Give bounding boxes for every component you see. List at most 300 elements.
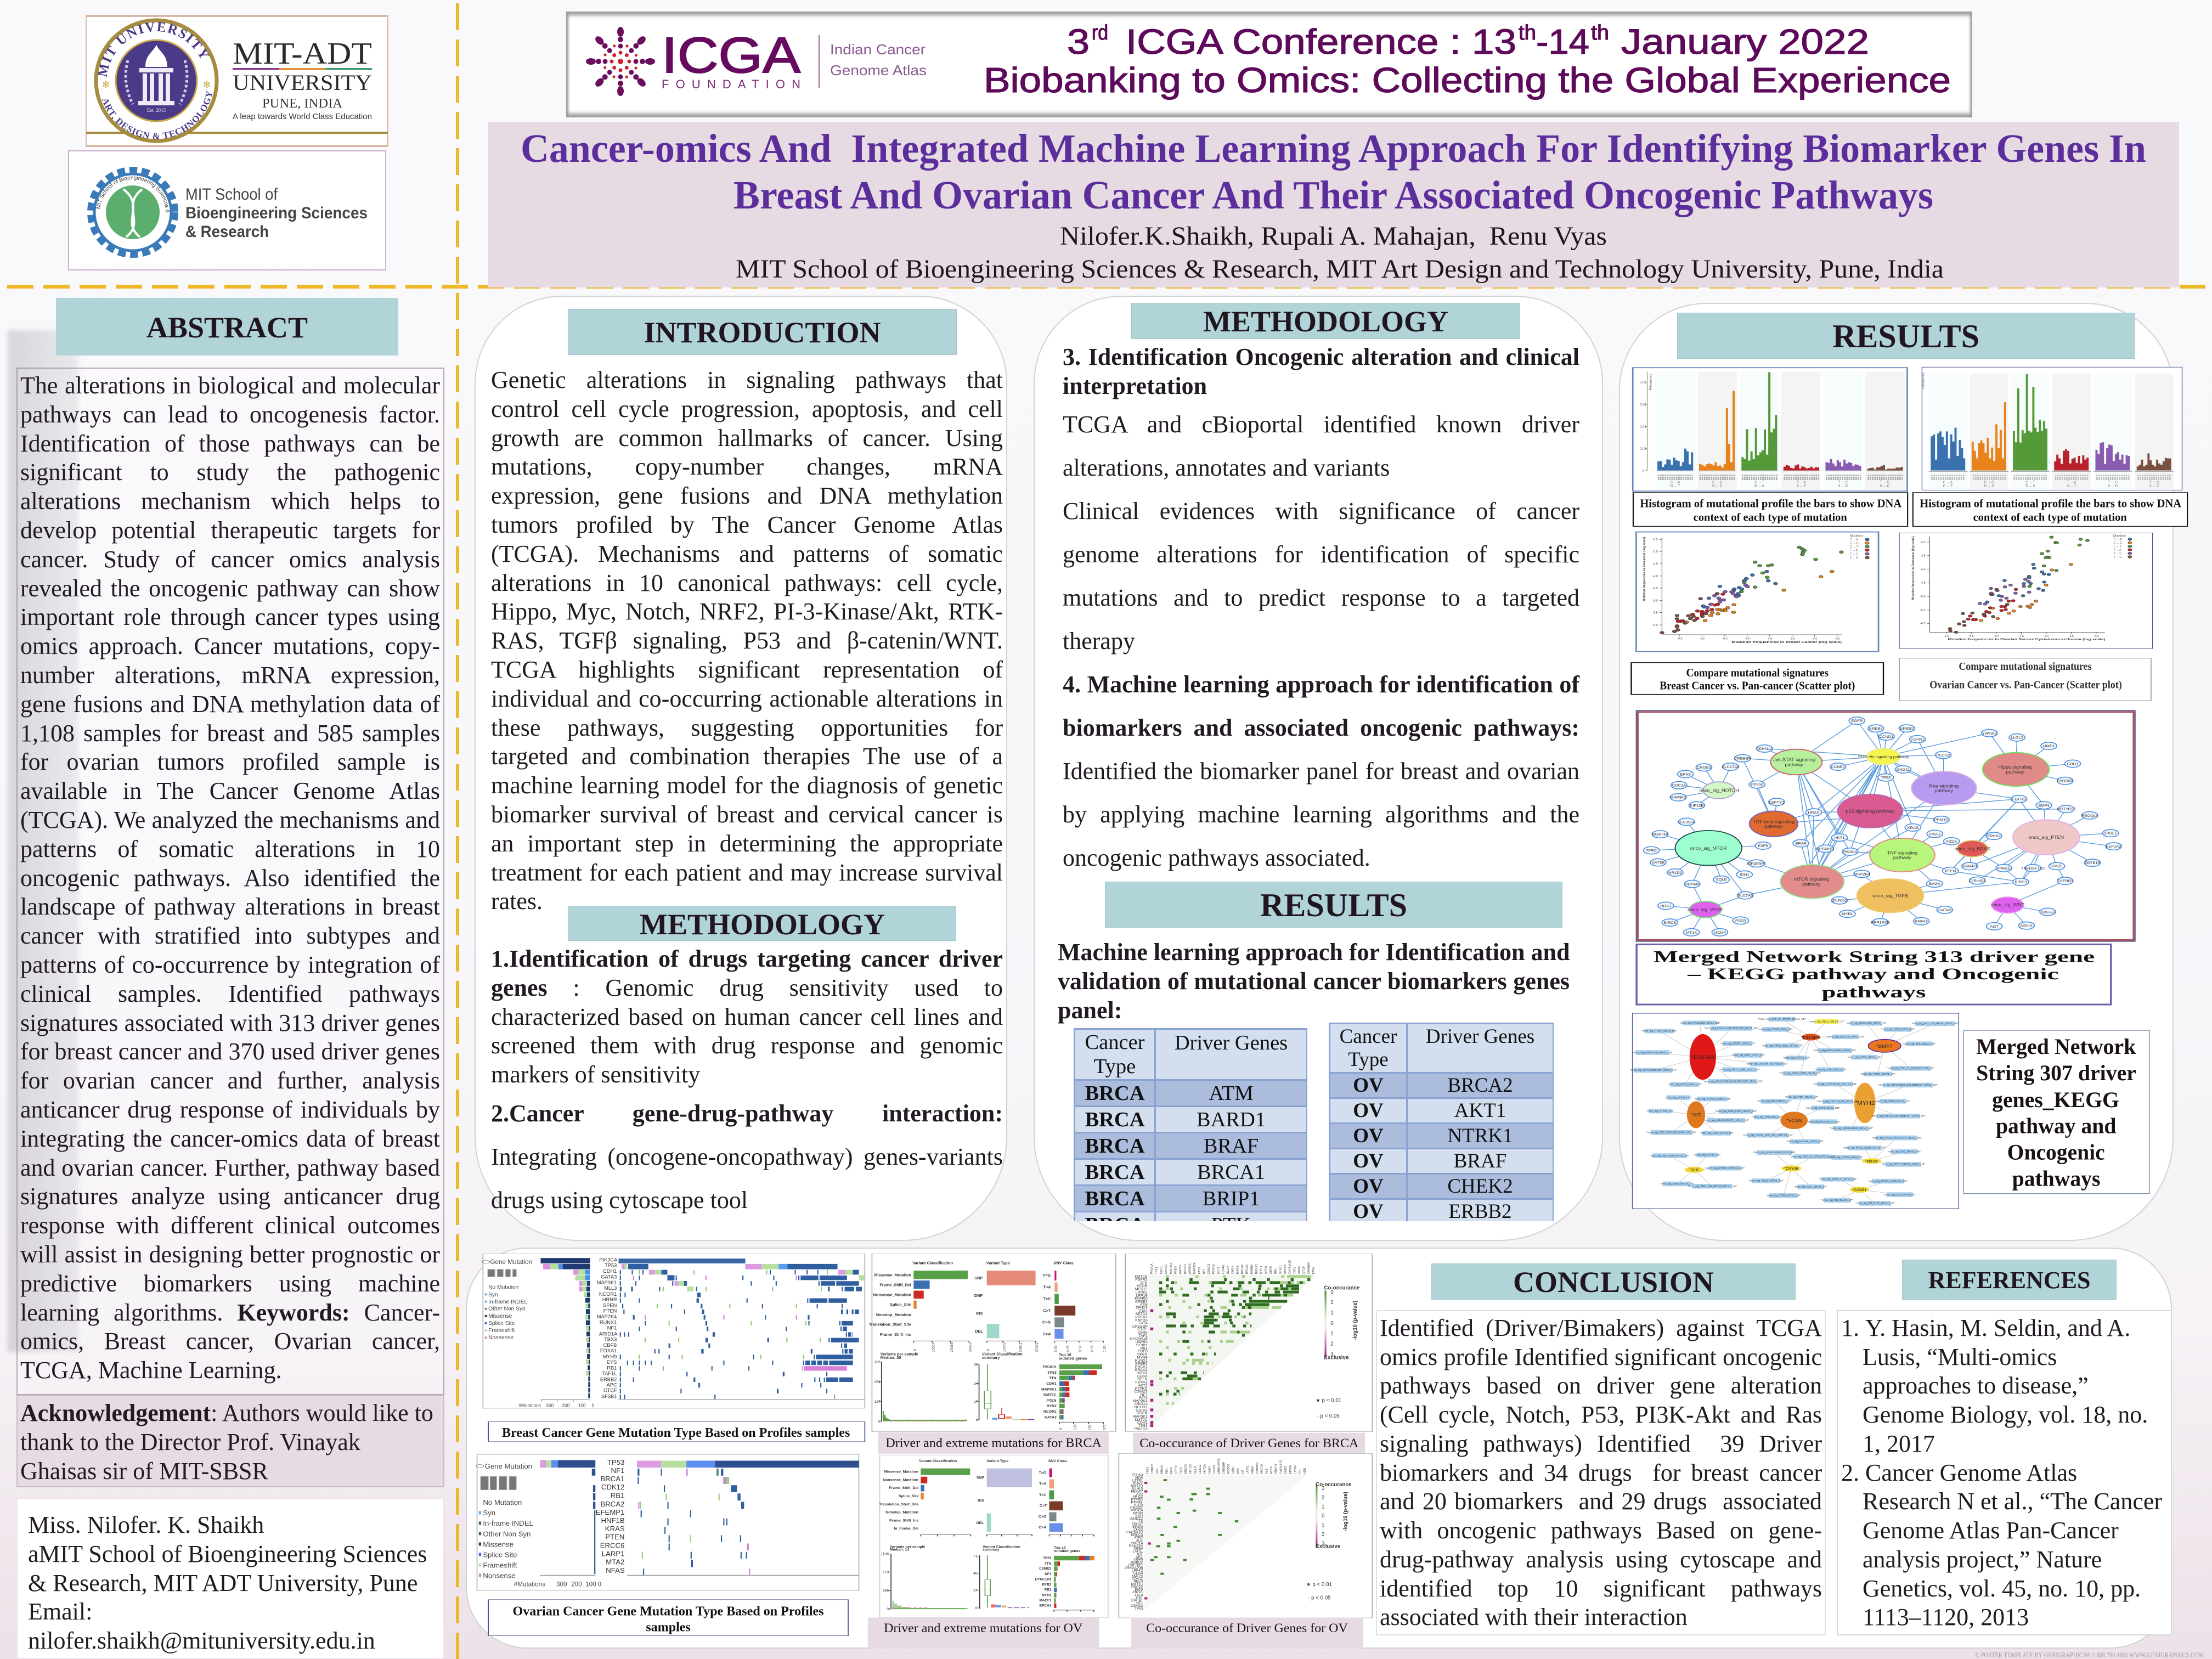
text: contact details: Miss. Nilofer. K. Shaikh — [28, 1511, 264, 1538]
chart: OV co-occurrence heatmap: ZFHX3 — [1132, 1474, 1143, 1477]
chart: merged network 313 driver genes: FGFR3 — [2012, 797, 2025, 802]
chart: breast cancer oncoplot: MLL3 — [604, 1285, 617, 1291]
ICGA foundation logo and conference title: Biobanking to Omics: Collecting the Global Experience — [984, 60, 1951, 100]
chart: breast cancer oncoplot — [482, 1254, 865, 1408]
text: introduction body: mutations, copy-number changes, mRNA — [491, 453, 1003, 480]
heading: references: REFERENCES — [1928, 1267, 2090, 1294]
chart: OV co-occurrence heatmap: KMT2A — [1204, 1464, 1207, 1474]
chart: merged network 307 driver genes: "onco_sig_BMI1_DN.V1_DN" — [1660, 1182, 1695, 1185]
chart: breast cancer scatter plot: -3.5 — [1652, 562, 1658, 566]
chart: OV co-occurrence heatmap: 2 — [1322, 1495, 1324, 1501]
chart: breast cancer oncoplot: ARID1A — [599, 1331, 618, 1336]
chart: OV co-occurrence heatmap: NBEA — [1133, 1547, 1143, 1551]
text: abstract body: cancer. Study of cancer omics analysis — [20, 546, 440, 573]
chart: breast mutational histogram: T → G — [1880, 481, 1889, 484]
chart: BRCA co-occurrence heatmap: LRRK2 — [1136, 1290, 1148, 1294]
chart: ovarian cancer scatter plot: -5.5 — [1968, 635, 1974, 638]
text: steps 3 and 4: Identified the biomarker panel for breast and ovarian — [1063, 758, 1579, 785]
chart: breast cancer oncoplot: MAP3K1 — [597, 1280, 617, 1285]
text: methodology steps 1 and 2: genes : Genomic drug sensitivity used to — [491, 974, 1003, 1001]
chart: BRCA driver and extreme mutations summary: Missense_Mutation — [874, 1272, 911, 1277]
chart: merged network 313 driver genes: AKT1 — [1835, 836, 1844, 840]
chart: OV co-occurrence heatmap: PTPRB — [1131, 1500, 1143, 1504]
chart: OV driver and extreme mutations summary: CSMD3 — [1039, 1567, 1052, 1571]
chart: merged network 307 driver genes: "onco_sig_ALK_DN.V1_DN" — [1794, 1186, 1827, 1188]
chart: BRCA co-occurrence heatmap: KMT2C — [1135, 1418, 1148, 1422]
chart: OV co-occurrence heatmap: LRP1B — [1175, 1464, 1178, 1474]
text: methodology steps 1 and 2: 1.Identification of drugs targeting cancer driver — [491, 945, 1003, 972]
logo: MIT School of Bioengineering Sciences & Research: MIT School of — [185, 185, 278, 204]
text: steps 3 and 4: alterations, annotates and variants — [1063, 454, 1390, 481]
chart: merged network 313 driver genes: PPM1E — [1997, 866, 2011, 871]
chart: OV driver and extreme mutations summary: SNV Class — [1048, 1459, 1067, 1463]
chart: OV driver and extreme mutations summary: RYR2 — [1042, 1583, 1052, 1587]
table: OV driver genes: Cancer — [1340, 1025, 1397, 1048]
text: abstract body: response with different clinical outcomes — [20, 1212, 440, 1239]
text: acknowledgement — [20, 1400, 433, 1485]
chart: OV driver and extreme mutations summary: Missense_Mutation — [884, 1470, 918, 1474]
table: BRCA driver genes: BARD1 — [1197, 1108, 1266, 1131]
logo: MIT-ADT University: Est. 2015 — [147, 108, 166, 113]
chart: breast cancer scatter plot: -2.5 — [1835, 637, 1840, 641]
chart: BRCA co-occurrence heatmap: LRP1B — [1136, 1294, 1148, 1297]
chart: BRCA co-occurrence heatmap: CBFB — [1269, 1266, 1273, 1274]
chart: OV co-occurrence heatmap: CDK12 — [1132, 1577, 1143, 1581]
chart: breast cancer scatter plot: -4.5 — [1652, 587, 1658, 590]
chart: BRCA co-occurrence heatmap: KMT2A — [1135, 1319, 1148, 1323]
chart: OV driver and extreme mutations summary: Variant Type — [986, 1459, 1009, 1463]
chart: BRCA co-occurrence heatmap: Exclusive — [1324, 1355, 1349, 1361]
chart: OV co-occurrence heatmap: EP300 — [1289, 1465, 1293, 1474]
chart: OV driver and extreme mutations summary: In_Frame_Del — [894, 1527, 918, 1531]
chart: merged network 313 driver genes: LIMD1 — [2042, 744, 2055, 748]
chart: breast cancer scatter plot: -6.0 — [1677, 637, 1683, 641]
chart: merged network 307 driver genes: "onco_sig_MTOR_UP.N4.V1_UP" — [1705, 1167, 1745, 1169]
chart: breast cancer oncoplot: MYH9 — [603, 1354, 617, 1359]
chart: merged network 313 driver genes: AGT — [1990, 924, 1999, 929]
chart: OV co-occurrence heatmap: ATRX — [1134, 1536, 1143, 1540]
chart: merged network 307 driver genes: "onco_sig_AKT_UP_MTOR_DN.V1_UP" — [1758, 1018, 1806, 1020]
chart: OV co-occurrence heatmap: EPHA7 — [1294, 1464, 1297, 1474]
chart: merged network 307 driver genes — [1630, 1013, 1959, 1209]
chart: OV co-occurrence heatmap: CHD4 — [1133, 1572, 1143, 1576]
authors and affiliation: MIT School of Bioengineering Sciences & Research, MIT Art Design and Technology University, Pune, India — [736, 255, 1944, 284]
text: references list: 1, 2017 — [1863, 1430, 1935, 1457]
table: BRCA driver genes: ATM — [1209, 1082, 1254, 1105]
chart: merged network 307 driver genes: "onco_sig_SNF5_DN.V1_UP" — [1875, 1100, 1911, 1103]
panel: references text — [1837, 1310, 2172, 1635]
chart: OV driver and extreme mutations summary: 778 — [883, 1571, 889, 1575]
chart: BRCA co-occurrence heatmap — [1125, 1254, 1372, 1431]
chart: merged network 313 driver genes: mTOR signaling — [1794, 877, 1829, 882]
table: OV driver genes: OV — [1353, 1099, 1384, 1121]
caption: merged network 307 driver genes: String 307 driver — [1976, 1061, 2136, 1085]
dashed vertical divider — [456, 3, 459, 1659]
chart: ovarian mutational histogram: C → G — [1984, 481, 1994, 484]
chart: breast mutational histogram: 0.08 — [1640, 381, 1646, 385]
results charts: histograms and scatter plots — [1630, 366, 2188, 701]
chart: ovarian cancer oncoplot: BRCA1 — [600, 1475, 624, 1483]
chart: BRCA driver and extreme mutations summary: 377 — [1103, 1424, 1107, 1430]
text: introduction body: targeted and combination therapies The use of a — [491, 743, 1003, 770]
chart: merged network 313 driver genes: pathway — [1785, 762, 1804, 767]
table: BRCA driver genes: BRCA — [1085, 1187, 1145, 1210]
chart: BRCA co-occurrence heatmap: KMT2D — [1135, 1275, 1148, 1279]
title: Breast And Ovarian Cancer And Their Associated Oncogenic Pathways — [733, 173, 1933, 217]
chart: OV co-occurrence heatmap: LZTR1 — [1132, 1479, 1143, 1482]
chart: OV co-occurrence heatmap: 1 — [1322, 1504, 1324, 1510]
caption: breast scatter: Compare mutational signatures — [1686, 666, 1829, 679]
heading: methodology (middle): METHODOLOGY — [1203, 305, 1448, 338]
text: abstract body: predictive biomarkers using machine — [20, 1270, 440, 1297]
chart: ovarian cancer scatter plot: C → A — [2114, 538, 2122, 541]
text: machine learning results intro: Machine learning approach for Identification and — [1058, 939, 1570, 966]
text: introduction body — [491, 366, 1003, 915]
chart: BRCA co-occurrence heatmap: TAF1 — [1293, 1267, 1296, 1274]
heading: introduction: INTRODUCTION — [644, 316, 881, 349]
chart: OV co-occurrence heatmap: KDR — [1136, 1514, 1143, 1518]
chart: ovarian mutational histogram: G → A — [2025, 484, 2035, 488]
caption: breast histogram — [1633, 493, 1908, 526]
chart: BRCA driver and extreme mutations summary: TP53 — [1047, 1371, 1057, 1375]
chart: BRCA driver and extreme mutations summary: C>A — [1043, 1331, 1051, 1336]
chart: merged network 313 driver genes: RPS6KB1 — [1816, 847, 1835, 851]
chart: breast cancer oncoplot: GATA3 — [601, 1274, 617, 1280]
chart: OV co-occurrence heatmap: · p < 0.05 — [1308, 1595, 1331, 1601]
chart: BRCA co-occurrence heatmap: MAP3K1 — [1133, 1415, 1148, 1419]
chart: merged network 313 driver genes: KRAS — [1908, 826, 1918, 830]
chart: merged network 313 driver genes: onco_sig_KRAS — [1955, 846, 1990, 851]
chart: BRCA co-occurrence heatmap: USP9X — [1136, 1340, 1148, 1344]
text: introduction body: an important step in determining the appropriate — [491, 830, 1003, 857]
text: introduction body: treatment for each patient and may increase survival — [491, 859, 1003, 886]
chart: OV co-occurrence heatmap: KMT2D — [1131, 1485, 1143, 1488]
chart: OV driver and extreme mutations summary: T>C — [1039, 1493, 1046, 1497]
chart: OV co-occurrence heatmap: APC — [1136, 1555, 1143, 1559]
table: BRCA driver genes: BRCA — [1085, 1082, 1145, 1105]
chart: BRCA co-occurrence heatmap: MAP3K4 — [1133, 1400, 1148, 1403]
chart: BRCA driver and extreme mutations summary: 52 — [974, 1363, 978, 1367]
text: introduction body: Hippo, Myc, Notch, NRF2, PI-3-Kinase/Akt, RTK- — [491, 598, 1003, 625]
chart: merged network 313 driver genes: onco_sig_WNT — [1991, 902, 2024, 907]
logo: MIT-ADT University: PUNE, INDIA — [262, 97, 343, 111]
chart: OV driver and extreme mutations summary: C>G — [1039, 1515, 1046, 1519]
chart: BRCA driver and extreme mutations summary: Splice_Site — [890, 1302, 911, 1307]
chart: BRCA co-occurrence heatmap: TP53 — [1138, 1424, 1148, 1428]
chart: BRCA co-occurrence heatmap: ERBB3 — [1135, 1300, 1148, 1304]
text: abstract body — [20, 372, 440, 1384]
chart: OV driver and extreme mutations summary: SNP — [977, 1476, 984, 1480]
chart: OV driver and extreme mutations summary: DYNC1H1 — [1035, 1578, 1052, 1582]
text: conclusion body — [1380, 1314, 1822, 1632]
chart: breast cancer oncoplot: CTCF — [603, 1388, 617, 1393]
chart: merged network 313 driver genes: SLC7A5 — [1737, 894, 1753, 898]
chart: breast cancer scatter plot: T → G — [1850, 556, 1858, 560]
chart: OV co-occurrence heatmap: LATS1 — [1132, 1550, 1143, 1554]
chart: merged network 313 driver genes: CCNE1 — [1831, 765, 1845, 769]
chart: merged network 313 driver genes: onco_sig_MTOR — [1690, 845, 1727, 851]
chart: merged network 313 driver genes: GATA3 — [1938, 908, 1951, 912]
chart: merged network 313 driver genes: NR1D1 — [1668, 871, 1682, 875]
chart: BRCA driver and extreme mutations summary: summary — [982, 1355, 1000, 1360]
text: machine learning results intro: panel: — [1058, 997, 1122, 1024]
chart: merged network 313 driver genes: PPM1D — [1934, 818, 1949, 822]
chart: breast cancer scatter plot: -4.0 — [1767, 637, 1772, 641]
chart: merged network 313 driver genes: Ras signaling — [1929, 783, 1959, 788]
table: BRCA driver genes: Cancer — [1085, 1031, 1144, 1054]
text: abstract body: (TCGA). We analyzed the mechanisms and — [20, 806, 440, 833]
chart: merged network 313 driver genes: PIK3CA — [1843, 850, 1858, 854]
text: introduction body: these pathways, suggesting opportunities for — [491, 714, 1003, 741]
chart: merged network 307 driver genes: "onco_sig_RB_P130_DN.V1_DN" — [1650, 1154, 1690, 1157]
chart: OV co-occurrence heatmap: ARID2 — [1133, 1495, 1143, 1499]
chart: ovarian mutational histogram: A → T — [2067, 484, 2076, 488]
chart: breast cancer oncoplot: RUNX1 — [600, 1319, 617, 1325]
chart: merged network 307 driver genes: "onco_sig_GCNP_SHH_UP_LATE.V1_UP" — [1742, 1134, 1793, 1136]
table: BRCA driver genes: Type — [1094, 1055, 1136, 1078]
chart: merged network 313 driver genes: MCM4 — [1714, 930, 1726, 935]
panel: results — [1619, 303, 2174, 1241]
chart: BRCA co-occurrence heatmap: ERBB2 — [1135, 1362, 1148, 1366]
chart: breast mutational histogram: A → T — [1797, 484, 1806, 488]
text: introduction body: rates. — [491, 888, 543, 915]
text: contact details: aMIT School of Bioengineering Sciences — [28, 1541, 427, 1567]
chart: merged network 313 driver genes: PLCG2 — [1937, 753, 1950, 757]
title block — [488, 122, 2179, 287]
chart: breast cancer oncoplot: APC — [607, 1383, 617, 1387]
chart: ovarian cancer oncoplot: No Mutation — [483, 1498, 522, 1506]
chart: BRCA driver and extreme mutations summary: 127 — [874, 1400, 881, 1404]
conference banner — [566, 12, 1972, 117]
chart: OV co-occurrence heatmap: PIK3CB — [1130, 1506, 1143, 1510]
chart: BRCA driver and extreme mutations summary: Nonsense_Mutation — [873, 1292, 911, 1297]
chart: ovarian cancer scatter plot: Mutation frequencies in Pancancer (log scale) — [1912, 537, 1915, 600]
chart: merged network 307 driver genes: "onco_sig_PDGF_UP.V1_DN" — [1748, 1180, 1784, 1182]
chart: ovarian mutational histogram: Frequency — [1922, 372, 1926, 389]
table: OV driver genes: NTRK1 — [1447, 1125, 1513, 1147]
chart: BRCA co-occurrence heatmap: -log10 (p-value) — [1352, 1301, 1358, 1340]
caption: merged network 307 driver genes: pathways — [2012, 1167, 2100, 1191]
caption: ovarian histogram: context of each type of mutation — [1973, 511, 2127, 523]
chart: BRCA co-occurrence heatmap: 1 — [1330, 1310, 1334, 1316]
chart: breast cancer scatter plot: -4.0 — [1652, 575, 1658, 578]
text: references list: 1113–1120, 2013 — [1863, 1604, 2029, 1630]
chart: BRCA driver and extreme mutations summary: 0 — [1059, 1427, 1063, 1430]
text: abstract body: Identification of those pathways can be — [20, 430, 440, 457]
chart: merged network 307 driver genes: "onco_sig_KRAS.PROSTATE_UP.V1_DN" — [1872, 1137, 1922, 1139]
chart: OV co-occurrence heatmap: RANBP2 — [1129, 1544, 1143, 1548]
chart: breast mutational histogram: C → G — [1712, 481, 1723, 484]
chart: ovarian cancer oncoplot: CDK12 — [601, 1483, 624, 1491]
chart: merged network 307 driver genes: "onco_sig_STK33_DN" — [1646, 1110, 1674, 1112]
chart: BRCA co-occurrence heatmap: RELN — [1227, 1266, 1230, 1274]
chart: breast cancer oncoplot: Splice Site — [488, 1321, 515, 1327]
chart: OV co-occurrence heatmap: RB1 — [1136, 1596, 1143, 1600]
chart: ovarian cancer oncoplot: RB1 — [611, 1492, 624, 1500]
text: conclusion body: with oncogenic pathways Based on gene- — [1380, 1517, 1822, 1544]
chart: ovarian cancer scatter plot: -3.0 — [1920, 541, 1926, 544]
chart: BRCA co-occurrence heatmap: SPEN — [1137, 1352, 1148, 1356]
chart: merged network 313 driver genes: pathway — [1802, 882, 1821, 887]
chart: ovarian mutational histogram: G → C — [1984, 484, 1995, 488]
text: introduction body: control cell cycle progression, apoptosis, and cell — [491, 396, 1003, 422]
chart: breast cancer oncoplot: TAF1L — [602, 1371, 617, 1376]
chart: OV co-occurrence heatmap: CHD2 — [1133, 1528, 1143, 1532]
chart: breast mutational histogram: 0.06 — [1640, 404, 1646, 407]
chart: OV driver and extreme mutations summary: Translation_Start_Site — [879, 1503, 918, 1506]
chart: breast cancer scatter plot: -5.5 — [1700, 637, 1705, 641]
chart: merged network 313 driver genes — [1636, 710, 2135, 941]
chart: OV co-occurrence heatmap: PIK3CA — [1131, 1509, 1143, 1513]
chart: merged network 307 driver genes: "onco_sig_NFE2L2.V2" — [1664, 1096, 1692, 1099]
chart: breast cancer scatter plot: Mutation frequencies in Pancancer (log scale) — [1643, 537, 1646, 601]
text: abstract body: revealed the oncogenic pathway can show — [20, 575, 440, 602]
chart: ovarian mutational histogram: T → G — [2149, 481, 2159, 484]
chart: merged network 313 driver genes: ASH2L — [2020, 924, 2033, 928]
chart: OV co-occurrence heatmap: FAT3 — [1135, 1588, 1143, 1592]
chart: ovarian cancer scatter plot: -4.0 — [1920, 568, 1926, 571]
table: BRCA driver genes: BRAF — [1204, 1135, 1259, 1158]
bottom figures: Co-occurance of Driver Genes for BRCA — [1139, 1436, 1358, 1450]
chart: merged network 313 driver genes: SQLE — [1716, 878, 1727, 882]
chart: OV co-occurrence heatmap: EP300 — [1132, 1525, 1143, 1529]
caption: OV driver mutations — [868, 1617, 1099, 1649]
text: references list: 1. Y. Hasin, M. Seldin, and A. — [1841, 1314, 2130, 1341]
chart: BRCA driver and extreme mutations summary: Variant Classification — [912, 1260, 953, 1265]
chart: BRCA co-occurrence heatmap: 2 — [1330, 1300, 1334, 1306]
caption: ovarian histogram — [1913, 493, 2187, 526]
chart: merged network 307 driver genes: "onco_sig_KRAS.DF.V1_UP" — [1757, 1100, 1792, 1103]
chart: OV co-occurrence heatmap: APC — [1237, 1468, 1240, 1474]
chart: BRCA driver and extreme mutations summary: KMT2C — [1043, 1393, 1057, 1397]
chart: BRCA driver and extreme mutations summary: DEL — [975, 1329, 983, 1334]
text: introduction body: tumors profiled by The Cancer Genome Atlas — [491, 511, 1003, 538]
chart: merged network 313 driver genes: BRAF — [1796, 842, 1807, 845]
chart: merged network 307 driver genes: "CRYAB — [1785, 1167, 1798, 1171]
chart: breast mutational histogram: C → A — [1671, 481, 1680, 484]
chart: breast cancer oncoplot: NF1 — [607, 1325, 617, 1331]
chart: ovarian cancer scatter plot: C → T — [2114, 545, 2121, 549]
chart: OV co-occurrence heatmap: ARHGAP35 — [1125, 1566, 1143, 1570]
chart: breast cancer oncoplot: Other Non Syn — [488, 1306, 526, 1312]
text: machine learning results intro: validation of mutational cancer biomarkers genes — [1058, 968, 1570, 995]
text: introduction body: alterations in 10 canonical pathways: cell cycle, — [491, 569, 1003, 596]
text: references list: Research N et al., “The Cancer — [1863, 1488, 2162, 1515]
chart: ovarian cancer oncoplot: TP53 — [607, 1458, 624, 1466]
chart: merged network 313 driver genes: MYBL — [1842, 912, 1853, 916]
chart: BRCA co-occurrence heatmap: BRCA1 — [1135, 1365, 1148, 1369]
ICGA foundation logo and conference title: ICGA Conference : 13 — [1126, 22, 1516, 61]
chart: BRCA co-occurrence heatmap: UBR5 — [1298, 1266, 1301, 1274]
text: introduction body: Genetic alterations in signaling pathways that — [491, 366, 1003, 393]
text: abstract body: for ovarian cancer and further, analysis — [20, 1067, 440, 1094]
bottom figures — [466, 1240, 1399, 1659]
chart: BRCA co-occurrence heatmap: PIK3CA — [1150, 1263, 1154, 1274]
chart: ovarian cancer scatter plot: -3.5 — [1920, 555, 1926, 558]
chart: merged network 307 driver genes: "onco_sig_P53_DN.V2_DN" — [1888, 1150, 1921, 1153]
chart: merged network 307 driver genes: "IDH1 — [1689, 1169, 1699, 1172]
text: steps 3 and 4: biomarkers and associated oncogenic pathways: — [1063, 714, 1579, 741]
chart: OV co-occurrence heatmap: SMC1A — [1261, 1464, 1264, 1474]
chart: breast cancer oncoplot: NCOR1 — [599, 1291, 617, 1297]
chart: merged network 313 driver genes: LLGL2 — [2011, 736, 2023, 740]
chart: ovarian cancer oncoplot: Splice Site — [483, 1550, 517, 1559]
text: contact details: nilofer.shaikh@mituniversity.edu.in — [28, 1627, 375, 1654]
chart: OV driver and extreme mutations summary: DEL — [977, 1521, 984, 1525]
chart: merged network 313 driver genes: RECQL4 — [2081, 814, 2098, 818]
chart: breast cancer scatter plot: -3.0 — [1652, 550, 1658, 554]
chart: OV co-occurrence heatmap: 3 — [1322, 1541, 1324, 1547]
text: steps 3 and 4: Clinical evidences with significance of cancer — [1063, 498, 1579, 524]
chart: OV co-occurrence heatmap: CACNA1D — [1279, 1460, 1283, 1474]
chart: breast cancer oncoplot: EYS — [607, 1359, 617, 1365]
chart: BRCA co-occurrence heatmap: CTCF — [1303, 1266, 1306, 1274]
text: abstract body: omics, Breast cancer, Ovarian cancer, — [20, 1328, 440, 1355]
chart: breast cancer scatter plot: -4.5 — [1745, 637, 1750, 641]
chart: BRCA driver and extreme mutations summary: C>T — [1043, 1308, 1051, 1313]
ICGA foundation logo and conference title: th — [1591, 21, 1609, 44]
chart: BRCA driver and extreme mutations summary: Variant Type — [986, 1260, 1010, 1265]
chart: merged network 307 driver genes: "onco_sig_PRC2_EED_UP.V1_UP" — [1762, 1045, 1803, 1047]
chart: BRCA co-occurrence heatmap: CREBBP — [1307, 1262, 1311, 1274]
chart: merged network 313 driver genes: SLC17A9 — [1722, 765, 1739, 769]
chart: BRCA co-occurrence heatmap: AKT1 — [1138, 1384, 1148, 1387]
chart: OV driver and extreme mutations summary: Median: 14 — [890, 1548, 909, 1552]
chart: BRCA co-occurrence heatmap: BIRC6 — [1137, 1372, 1148, 1375]
text: abstract body: for ovarian tumors profiled sample is — [20, 748, 440, 775]
chart: BRCA co-occurrence heatmap: MYH9 — [1260, 1266, 1263, 1274]
chart: merged network 307 driver genes: "onco_sig_RB_P107_DN.V1_UP" — [1855, 1202, 1895, 1205]
table: OV driver genes: OV — [1353, 1150, 1384, 1172]
chart: BRCA driver and extreme mutations summary: 24901 — [1019, 1342, 1023, 1352]
chart: OV driver and extreme mutations summary: Frame_Shift_Del — [889, 1486, 918, 1490]
chart: BRCA co-occurrence heatmap: ARID1A — [1134, 1402, 1148, 1406]
chart: OV co-occurrence heatmap: ATR — [1136, 1492, 1143, 1496]
chart: OV driver and extreme mutations summary: summary — [983, 1548, 1000, 1552]
chart: ovarian cancer oncoplot: PTEN — [605, 1533, 624, 1541]
chart: OV driver and extreme mutations summary: Variant Classification — [919, 1459, 957, 1463]
chart: breast mutational histogram: 0.04 — [1640, 426, 1646, 429]
caption: merged network 313 driver genes: Merged Network String 313 driver gene — [1654, 947, 2095, 966]
text: abstract body: TCGA, Machine Learning. — [20, 1357, 282, 1384]
chart: merged network 313 driver genes: GNG11 — [1896, 768, 1910, 772]
chart: BRCA co-occurrence heatmap: NCOR1 — [1135, 1406, 1148, 1409]
chart: merged network 313 driver genes: BAIAP3 — [1962, 865, 1977, 868]
chart: BRCA driver and extreme mutations summary: 125 — [1073, 1424, 1077, 1430]
text: abstract body: will assist in designing better prognostic or — [20, 1241, 440, 1268]
chart: OV co-occurrence heatmap: CACNA1D — [1126, 1531, 1143, 1534]
text: references list: Genetics, vol. 45, no. 10, pp. — [1863, 1575, 2141, 1602]
chart: breast cancer oncoplot: 200 — [562, 1403, 570, 1408]
chart: merged network 307 driver genes: "onco_sig_CYCLIN_D1_KE_.V1_DN" — [1813, 1083, 1857, 1085]
chart: breast mutational histogram: 0 — [1643, 470, 1645, 473]
chart: breast cancer oncoplot: CDH1 — [603, 1268, 617, 1274]
chart: OV co-occurrence heatmap: PTEN — [1133, 1503, 1143, 1507]
chart: ovarian cancer scatter plot: -5.0 — [1920, 595, 1926, 599]
ICGA foundation logo and conference title: 3 — [1067, 22, 1090, 61]
chart: OV driver and extreme mutations summary: Splice_Site — [899, 1494, 918, 1498]
panel: contact — [16, 1498, 444, 1659]
chart: ovarian cancer oncoplot: Missense — [483, 1540, 514, 1548]
chart: merged network 313 driver genes: Hippo signaling — [1999, 765, 2032, 770]
chart: merged network 307 driver genes: "onco_sig_ESC_V6.5_UP_EARLY.V1_DN" — [1646, 1131, 1697, 1133]
text: methodology step 2: drugs using cytoscape tool — [491, 1187, 748, 1214]
table: OV driver genes: OV — [1353, 1074, 1384, 1096]
chart: breast cancer oncoplot: TP53 — [605, 1263, 617, 1268]
chart: merged network 313 driver genes: CDH1 — [2067, 762, 2078, 766]
caption: ovarian oncoplot: samples — [646, 1620, 691, 1634]
chart: ovarian cancer scatter plot: Mutation frequencies in Ovarian Serous Cystadenocarcinoma (log scale) — [1948, 638, 2105, 641]
